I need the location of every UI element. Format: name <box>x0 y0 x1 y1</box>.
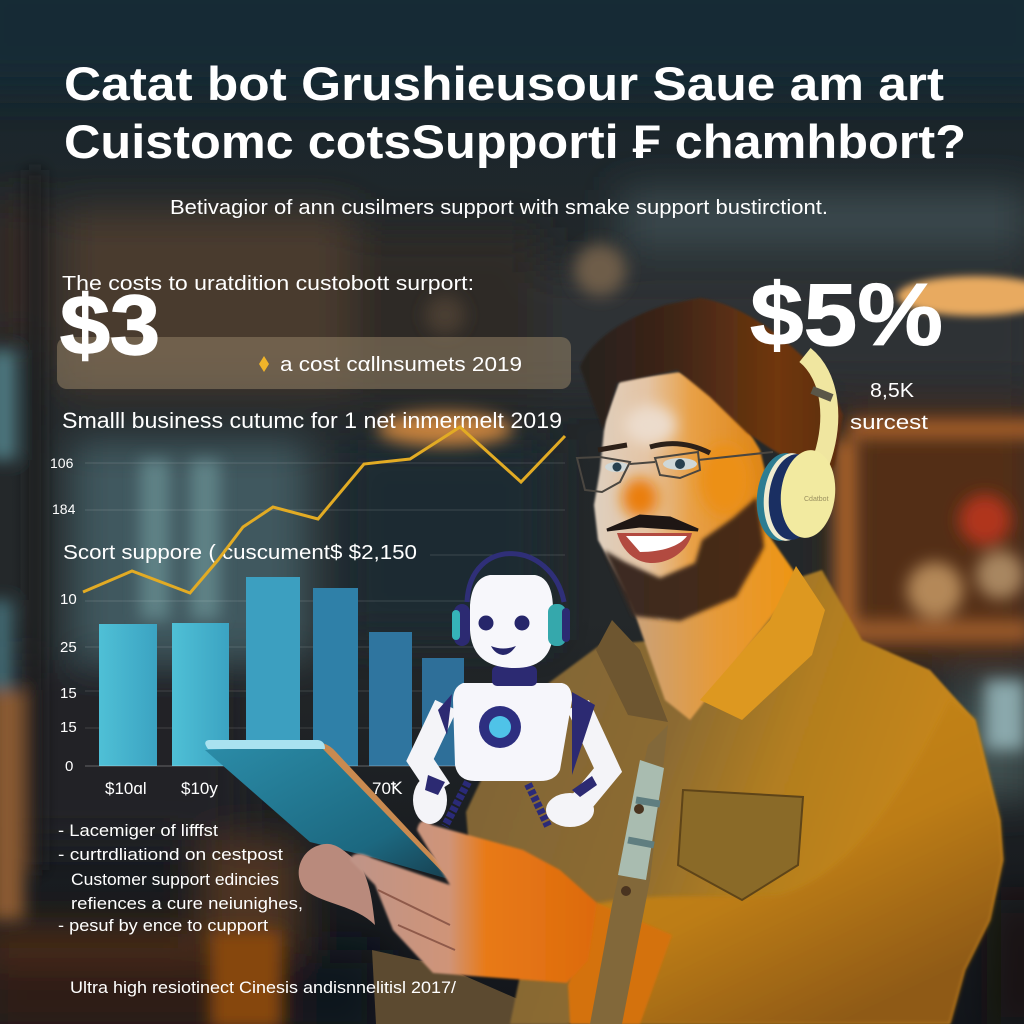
sleeve arm <box>590 700 1003 1024</box>
far sleeve cuff <box>372 950 570 1024</box>
collar <box>596 620 668 722</box>
robot torso <box>453 683 572 781</box>
chest pocket <box>678 790 803 900</box>
title: Cuistomc cotsSupporti ₣ chamhbort? <box>64 115 966 168</box>
cuff <box>568 903 672 1024</box>
plaid placket <box>590 725 668 1024</box>
robot eyes and mouth <box>478 616 494 630</box>
robot <box>413 554 608 827</box>
bar chart heading: Scort suppore ( cuscument$ $2,150 <box>63 541 417 564</box>
robot claws <box>445 782 548 826</box>
head <box>594 372 772 620</box>
robot headset <box>467 554 564 602</box>
bar chart: 25 <box>60 639 77 656</box>
bullet list: Customer support edincies <box>71 870 279 889</box>
line chart <box>83 427 565 593</box>
bullet list <box>58 821 303 935</box>
bar chart: 15 <box>60 685 77 702</box>
bullet list: - pesuf by ence to cupport <box>58 916 268 935</box>
robot arms <box>420 705 446 790</box>
title: Catat bot Grushieusour Saue am art <box>64 57 944 110</box>
callout pill: a cost cαllnsumets 2019 <box>280 353 522 376</box>
buttons <box>621 804 644 896</box>
headset: Cdatbot <box>804 496 829 503</box>
man with headset <box>372 298 1003 1024</box>
robot neck <box>492 666 537 686</box>
bar chart: 0 <box>65 758 73 775</box>
bar chart: 106 <box>50 455 74 471</box>
callout pill <box>57 337 571 389</box>
bullet list: refiences a cure neiunighes, <box>71 894 303 913</box>
big stat: $5%: $5% <box>750 265 943 364</box>
side stat: surcest <box>850 412 929 434</box>
bar chart: $10ɑl <box>105 779 147 798</box>
side stat <box>850 380 929 434</box>
moustache <box>607 516 698 530</box>
tablet <box>205 740 462 887</box>
bar chart <box>50 455 565 798</box>
subtitle: Betivagior of ann cusilmers support with smake support bustirctiont. <box>170 196 828 219</box>
side stat: 8,5K <box>870 380 915 402</box>
bar chart: 15 <box>60 719 77 736</box>
hair <box>580 298 843 505</box>
bar chart: 10 <box>60 591 77 608</box>
bar chart: $10y <box>181 779 218 798</box>
shirt body <box>466 570 1003 1024</box>
title <box>64 57 966 168</box>
bullet list: - curtrdliationd on cestpost <box>58 845 283 864</box>
bullet list: - Lacemiger of lifffst <box>58 821 218 840</box>
cheek and nose light <box>622 405 751 518</box>
mouth <box>617 533 692 563</box>
bar chart: 184 <box>52 501 76 517</box>
bar chart: 70Ꝁ <box>372 779 403 798</box>
neck <box>630 530 800 720</box>
eyebrows and eyes <box>598 444 710 453</box>
headset <box>753 355 839 543</box>
hands <box>299 821 597 983</box>
robot head <box>470 575 553 668</box>
footer: Ultra high resiotinect Cinesis andisnnelitisl 2017/ <box>70 978 456 997</box>
line chart heading: Smalll business cutumc for 1 net inmermelt 2019 <box>62 408 562 433</box>
cost heading: The costs to uratdition custobott surport: <box>62 272 474 295</box>
big stat: $3: $3 <box>60 278 160 372</box>
glasses <box>577 452 773 492</box>
beard <box>604 497 764 621</box>
